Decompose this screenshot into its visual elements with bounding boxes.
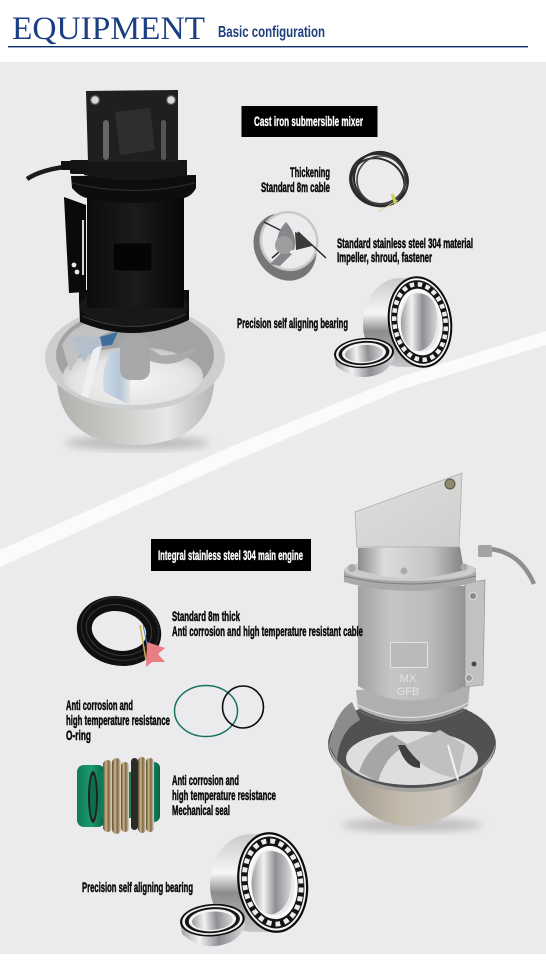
text: O-ring: O-ring <box>66 727 91 743</box>
cast lettering: GFB <box>397 686 419 698</box>
side bracket <box>465 580 485 687</box>
top flange <box>344 568 476 591</box>
shadow <box>342 818 482 832</box>
icon: stainless impeller shroud <box>241 201 329 293</box>
label: cast iron submersible mixer <box>242 106 378 137</box>
text: O-ring <box>66 697 170 743</box>
impeller blades <box>359 735 408 782</box>
text: O-ring: Anti corrosion and <box>66 697 133 713</box>
nameplate <box>113 243 152 271</box>
text: mechanical seal: Mechanical seal <box>172 802 230 818</box>
label: integral stainless steel main engine: Integral stainless steel 304 main engine <box>158 547 303 563</box>
text: stainless steel 304 material <box>337 235 473 265</box>
text: stainless steel 304 material: Impeller, shroud, fastener <box>337 249 432 265</box>
bowl <box>57 383 214 445</box>
bolts <box>91 96 99 104</box>
text: precision bearing lower: Precision self aligning bearing <box>82 879 193 895</box>
upper flange <box>71 175 196 203</box>
cast lettering: MX <box>400 673 417 685</box>
icon: black cable coil <box>75 591 165 667</box>
mounting plate <box>355 473 462 547</box>
cable <box>27 166 72 179</box>
cable <box>490 549 534 584</box>
subtitle: Basic configuration <box>218 24 325 41</box>
icon: mechanical seal <box>77 757 160 834</box>
text: precision bearing: Precision self aligning bearing <box>237 315 348 331</box>
bowl <box>340 762 484 826</box>
lower flange <box>79 290 189 333</box>
icon: bearing pair <box>333 272 458 377</box>
cast lettering <box>397 673 419 698</box>
text: standard 8m thick cable: Standard 8m thick <box>172 608 240 624</box>
motor body <box>358 586 465 700</box>
text: thickening cable: Thickening <box>290 164 330 180</box>
cast iron mixer photo <box>27 90 225 450</box>
text: mechanical seal: high temperature resistance <box>172 787 276 803</box>
label: integral stainless steel main engine <box>151 539 311 571</box>
side bracket <box>64 197 86 293</box>
icon: bearing pair lower <box>179 827 315 946</box>
text: thickening cable: Standard 8m cable <box>261 179 330 195</box>
shadow <box>65 436 209 450</box>
stainless mixer photo <box>328 473 534 832</box>
icon: cable coil <box>344 146 414 214</box>
text: thickening cable <box>261 164 330 195</box>
lower ring <box>356 685 470 722</box>
icon: O-rings <box>174 686 264 736</box>
mounting plate <box>86 90 178 162</box>
top ring <box>358 547 464 578</box>
impeller blades <box>103 350 130 405</box>
motor body <box>87 195 184 308</box>
bolt <box>445 479 455 489</box>
text: standard 8m thick cable <box>172 608 363 639</box>
nameplate <box>390 642 428 668</box>
title rule <box>8 46 528 47</box>
text: O-ring: high temperature resistance <box>66 712 170 728</box>
text: standard 8m thick cable: Anti corrosion and high temperature resistant cable <box>172 623 363 639</box>
text: mechanical seal: Anti corrosion and <box>172 772 239 788</box>
title: EQUIPMENT <box>12 11 205 47</box>
text: mechanical seal <box>172 772 276 818</box>
white diagonal band <box>0 331 546 567</box>
label: cast iron submersible mixer: Cast iron submersible mixer <box>254 113 363 129</box>
